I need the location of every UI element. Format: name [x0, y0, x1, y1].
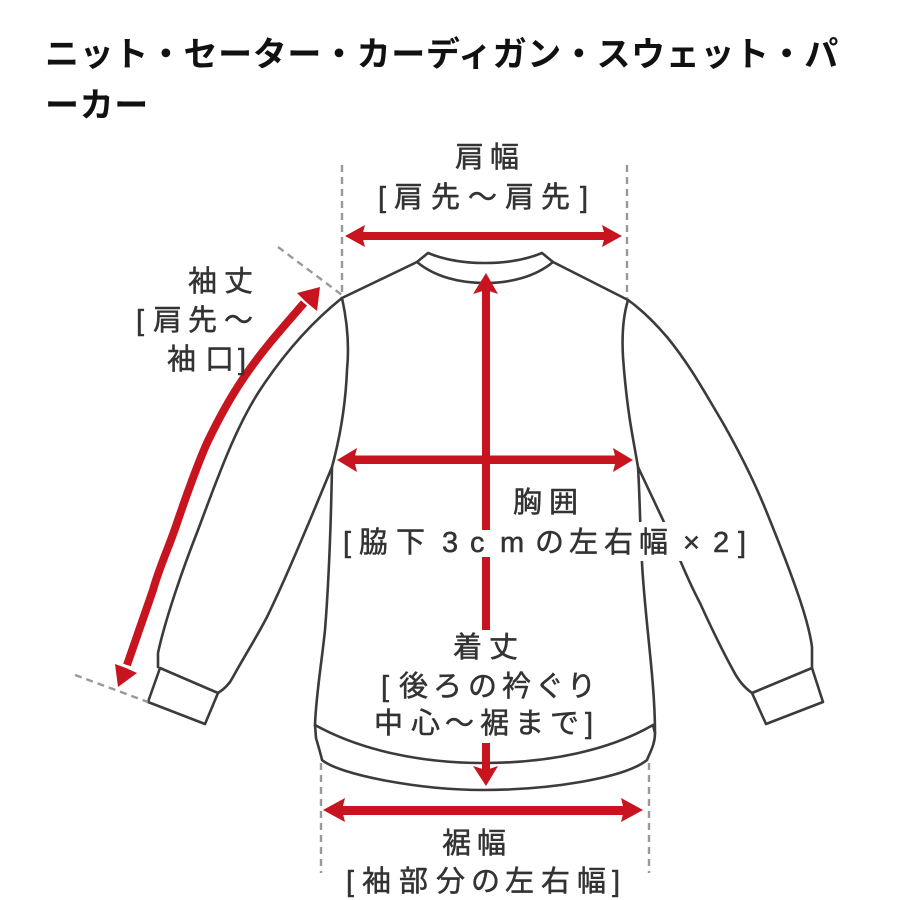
label: chest: 胸囲	[513, 486, 578, 519]
label: hem width: [袖部分の左右幅]	[346, 865, 620, 898]
label: sleeve length: 袖口]	[167, 343, 246, 376]
label: shoulder width: 肩幅	[455, 141, 519, 174]
sweater outline	[148, 253, 823, 790]
arrow: sleeve length	[115, 287, 320, 687]
title: ニット・セーター・カーディガン・スウェット・パーカー	[45, 36, 839, 125]
arrow: chest width	[337, 448, 633, 472]
label: chest: [脇下 3cm の左右幅 ×2]	[343, 526, 746, 559]
label: body length: 中心～裾まで]	[374, 707, 593, 740]
arrow: shoulder width	[345, 225, 622, 247]
dashed guide lines	[75, 165, 649, 873]
label: body length: [後ろの衿ぐり	[381, 670, 596, 703]
white knockout behind chest label	[340, 522, 755, 561]
label: body length: 着丈	[453, 631, 518, 664]
label: hem width: 裾幅	[442, 827, 506, 860]
arrow: body length	[473, 273, 498, 786]
arrow: hem width	[323, 798, 643, 822]
label: sleeve length: [肩先～	[136, 304, 253, 337]
label: body length	[374, 631, 596, 740]
label: shoulder width: [肩先～肩先]	[378, 181, 588, 214]
label: sleeve length: 袖丈	[188, 265, 253, 298]
label: sleeve length	[136, 265, 253, 376]
label: hem width	[346, 827, 620, 898]
label: shoulder width	[378, 141, 588, 214]
label: chest	[343, 486, 746, 559]
